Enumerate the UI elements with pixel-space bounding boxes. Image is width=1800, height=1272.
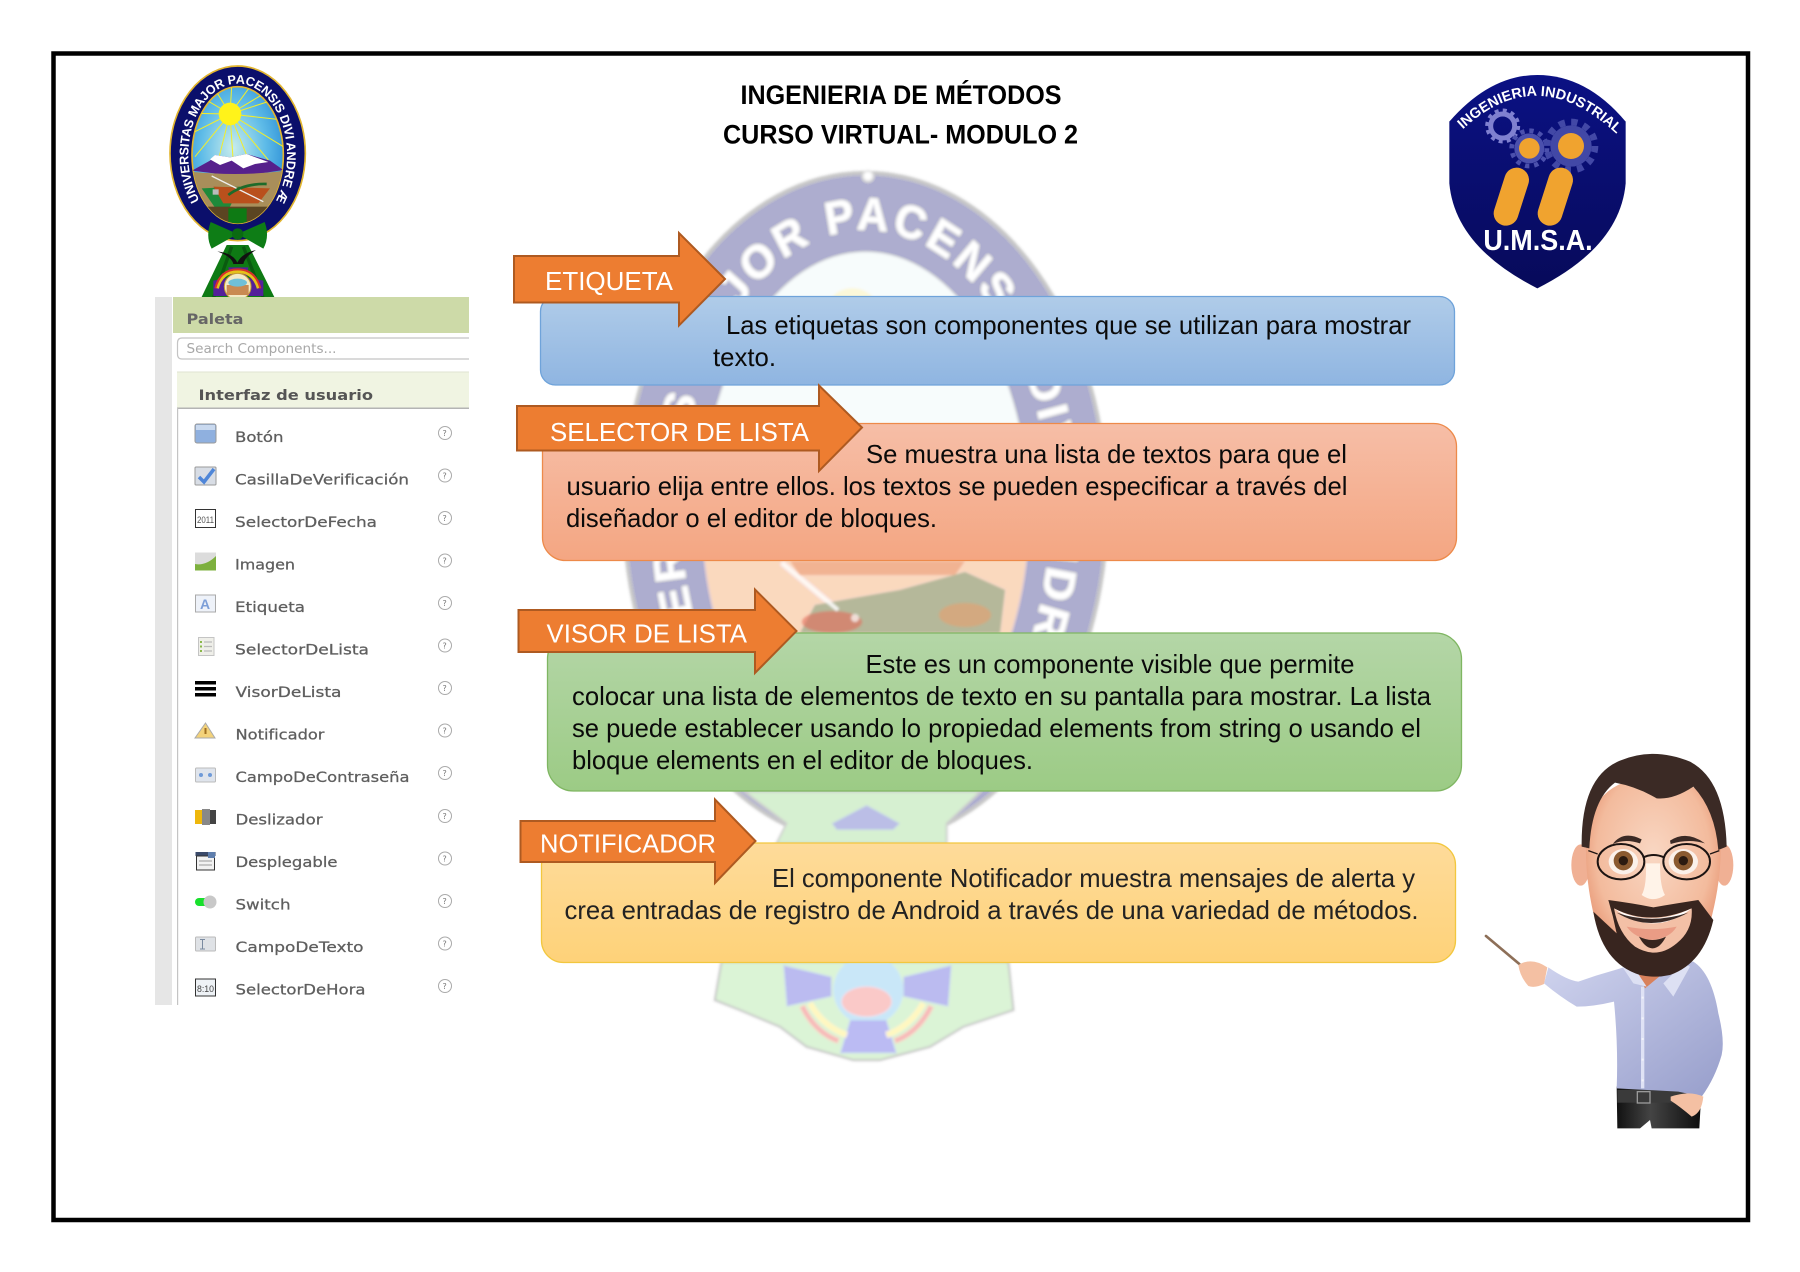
description text: Se muestra una lista de textos para que el <box>866 441 1347 469</box>
component list <box>195 424 452 998</box>
row: SelectorDeHora: SelectorDeHora <box>236 982 366 998</box>
row: Notificador <box>195 723 452 744</box>
panel: component palette <box>155 297 469 1005</box>
pointer stick <box>1486 936 1519 964</box>
smile <box>1614 908 1692 923</box>
watermark: university seal: UNIVERSITAS MAJOR PACENSIS DIVI ANDRE Æ <box>652 196 1080 632</box>
trousers <box>1617 1087 1702 1128</box>
description text <box>566 441 1348 533</box>
description text: bloque elements en el editor de bloques. <box>572 747 1033 775</box>
row: Notificador: Notificador <box>236 728 325 744</box>
description text: se puede establecer usando lo propiedad elements from string o usando el <box>572 715 1421 743</box>
row: VisorDeLista: ? <box>442 684 447 693</box>
hair <box>1582 754 1727 850</box>
search box <box>178 338 469 359</box>
row: Switch: ? <box>442 897 447 906</box>
panel: Etiqueta <box>514 233 1454 385</box>
description text <box>713 312 1411 372</box>
row: SelectorDeHora: ? <box>442 982 447 991</box>
watermark: university seal <box>624 170 1107 1062</box>
arrow label: VISOR DE LISTA: VISOR DE LISTA <box>546 620 748 648</box>
ears <box>1571 844 1590 886</box>
arrow label: SELECTOR DE LISTA: SELECTOR DE LISTA <box>550 419 810 447</box>
row: Desplegable: ? <box>442 854 447 864</box>
panel: Visor de lista <box>518 590 1462 791</box>
row: CampoDeTexto: ? <box>442 940 447 948</box>
row: Deslizador: ? <box>442 812 447 821</box>
shirt <box>1544 962 1723 1097</box>
search box: Search Components... <box>186 342 336 357</box>
description text: usuario elija entre ellos. los textos se pueden especificar a través del <box>566 473 1348 501</box>
palette header <box>173 297 469 333</box>
palette header: Paleta <box>186 312 244 328</box>
row: CampoDeContraseña <box>196 766 452 786</box>
row: Switch: Switch <box>236 898 290 914</box>
seal: Universidad Mayor de San Andrés <box>169 65 306 297</box>
arrow label: NOTIFICADOR: NOTIFICADOR <box>540 830 716 858</box>
description text: texto. <box>713 344 776 372</box>
arrow label: ETIQUETA: ETIQUETA <box>545 268 674 296</box>
hands <box>1518 961 1547 987</box>
eyes <box>1609 849 1638 874</box>
seal: Universidad Mayor de San Andrés: UNIVERSITAS MAJOR PACENSIS DIVI ANDRE Æ <box>180 75 296 204</box>
illustration: presenter with pointer <box>1486 754 1733 1128</box>
row: SelectorDeHora <box>196 979 452 998</box>
eyebrows <box>1613 836 1642 844</box>
row: Desplegable <box>196 852 452 871</box>
row: Switch <box>195 894 452 914</box>
row: Etiqueta: Etiqueta <box>235 600 305 616</box>
panel: Selector de lista <box>517 386 1456 560</box>
row: Imagen <box>195 552 452 574</box>
title: INGENIERIA DE MÉTODOS <box>740 80 1062 110</box>
row: CampoDeContraseña: CampoDeContraseña <box>236 770 410 786</box>
row: CasillaDeVerificación <box>195 467 452 488</box>
description text: diseñador o el editor de bloques. <box>566 505 937 533</box>
row: SelectorDeLista <box>198 638 452 658</box>
row: CasillaDeVerificación: CasillaDeVerificación <box>235 472 409 488</box>
row: Notificador: ? <box>442 726 447 736</box>
row: Etiqueta: A <box>200 596 210 612</box>
row: CampoDeTexto <box>196 937 452 956</box>
row: VisorDeLista <box>195 681 452 701</box>
row: SelectorDeFecha <box>196 510 452 531</box>
row: Deslizador: Deslizador <box>236 812 323 828</box>
logo: Ingenieria Industrial UMSA shield: INGENIERIA INDUSTRIAL <box>1456 86 1619 134</box>
logo: Ingenieria Industrial UMSA shield: U.M.S.A. <box>1483 225 1593 257</box>
face <box>1586 777 1721 973</box>
description text: crea entradas de registro de Android a través de una variedad de métodos. <box>564 897 1418 925</box>
arrow label: ETIQUETA <box>514 233 725 326</box>
panel: Notificador <box>520 800 1456 962</box>
description text: Este es un componente visible que permite <box>866 651 1354 679</box>
row: CasillaDeVerificación: ? <box>442 472 447 480</box>
description text: Las etiquetas son componentes que se utilizan para mostrar <box>726 312 1411 340</box>
row: Imagen: Imagen <box>235 558 295 574</box>
neck and collar <box>1637 967 1673 988</box>
row: Etiqueta <box>196 595 452 616</box>
description text <box>572 651 1432 775</box>
row: SelectorDeLista: ? <box>442 642 447 650</box>
row: CampoDeTexto: CampoDeTexto <box>236 940 364 956</box>
row: Desplegable: Desplegable <box>236 855 338 871</box>
nose <box>1642 863 1665 899</box>
row: Botón: ? <box>442 429 447 438</box>
row: Deslizador <box>195 809 452 828</box>
row: SelectorDeFecha: 2011 <box>197 515 214 525</box>
section heading: Interfaz de usuario <box>198 388 373 404</box>
row: Botón <box>195 424 452 446</box>
row: Etiqueta: ? <box>442 599 447 608</box>
description text: colocar una lista de elementos de texto en su pantalla para mostrar. La lista <box>572 683 1432 711</box>
row: SelectorDeLista: SelectorDeLista <box>235 642 369 658</box>
row: SelectorDeFecha: ? <box>442 514 447 523</box>
description text <box>564 865 1418 925</box>
beard <box>1593 900 1713 977</box>
row: CampoDeContraseña: ? <box>442 769 447 778</box>
arrow label: VISOR DE LISTA <box>518 590 796 673</box>
logo: Ingenieria Industrial UMSA shield <box>1449 75 1626 288</box>
description text: El componente Notificador muestra mensajes de alerta y <box>772 865 1415 893</box>
section heading <box>177 372 469 409</box>
row: SelectorDeHora: 8:10 <box>197 984 214 995</box>
row: SelectorDeFecha: SelectorDeFecha <box>235 515 377 531</box>
row: Imagen: ? <box>442 556 447 566</box>
title <box>723 80 1078 150</box>
glasses <box>1588 844 1719 879</box>
arrow label: NOTIFICADOR <box>520 800 756 883</box>
arrow label: SELECTOR DE LISTA <box>517 386 862 471</box>
row: VisorDeLista: VisorDeLista <box>236 685 342 701</box>
row: Botón: Botón <box>235 430 284 446</box>
title: CURSO VIRTUAL- MODULO 2 <box>723 120 1078 150</box>
